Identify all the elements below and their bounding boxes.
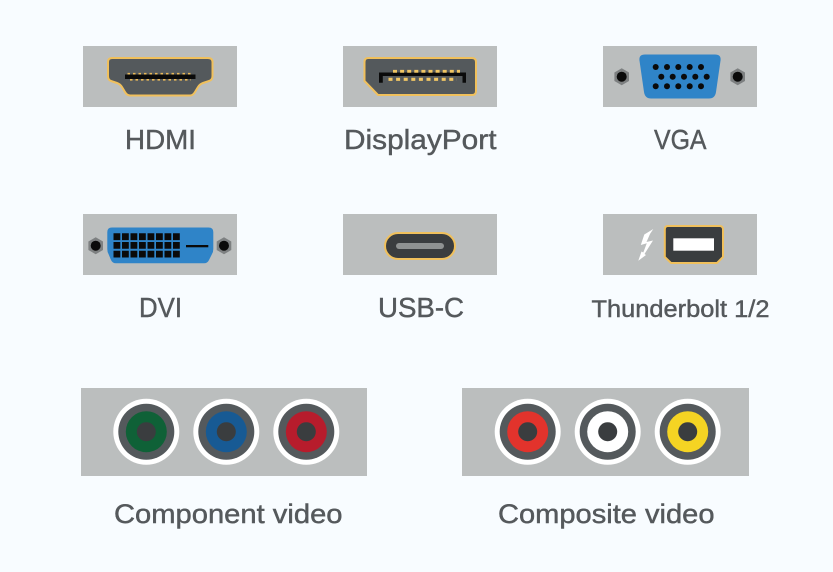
panel: Composite video (462, 388, 749, 529)
label: HDMI: HDMI (125, 124, 196, 155)
icon: USB-C port (385, 233, 455, 259)
label: Thunderbolt 1/2: Thunderbolt 1/2 (592, 296, 770, 323)
icon: lightning bolt (638, 229, 653, 261)
label: Component video: Component video (114, 499, 342, 529)
panel: VGA (603, 46, 757, 155)
panel: Component video (81, 388, 367, 529)
icon: yellow jack (655, 399, 721, 465)
panel: USB-C (343, 214, 497, 323)
label: DisplayPort: DisplayPort (344, 124, 497, 155)
icon: Thunderbolt port (665, 226, 723, 263)
icon: HDMI port (108, 58, 212, 96)
panel: DVI (83, 214, 237, 323)
icon: VGA port (614, 54, 745, 98)
panel: DisplayPort (343, 46, 497, 155)
label: USB-C: USB-C (378, 292, 464, 323)
label: Composite video: Composite video (498, 499, 714, 529)
icon: white jack (575, 399, 641, 465)
icon: red jack (495, 399, 561, 465)
icon: DVI port (88, 228, 231, 263)
label: VGA: VGA (654, 124, 707, 155)
icon: blue jack (193, 399, 259, 465)
icon: green jack (113, 399, 179, 465)
icon: red jack (273, 399, 339, 465)
panel: Thunderbolt 1/2 (592, 214, 770, 323)
icon: DisplayPort port (364, 58, 476, 95)
label: DVI: DVI (139, 292, 182, 323)
panel: HDMI (83, 46, 237, 155)
